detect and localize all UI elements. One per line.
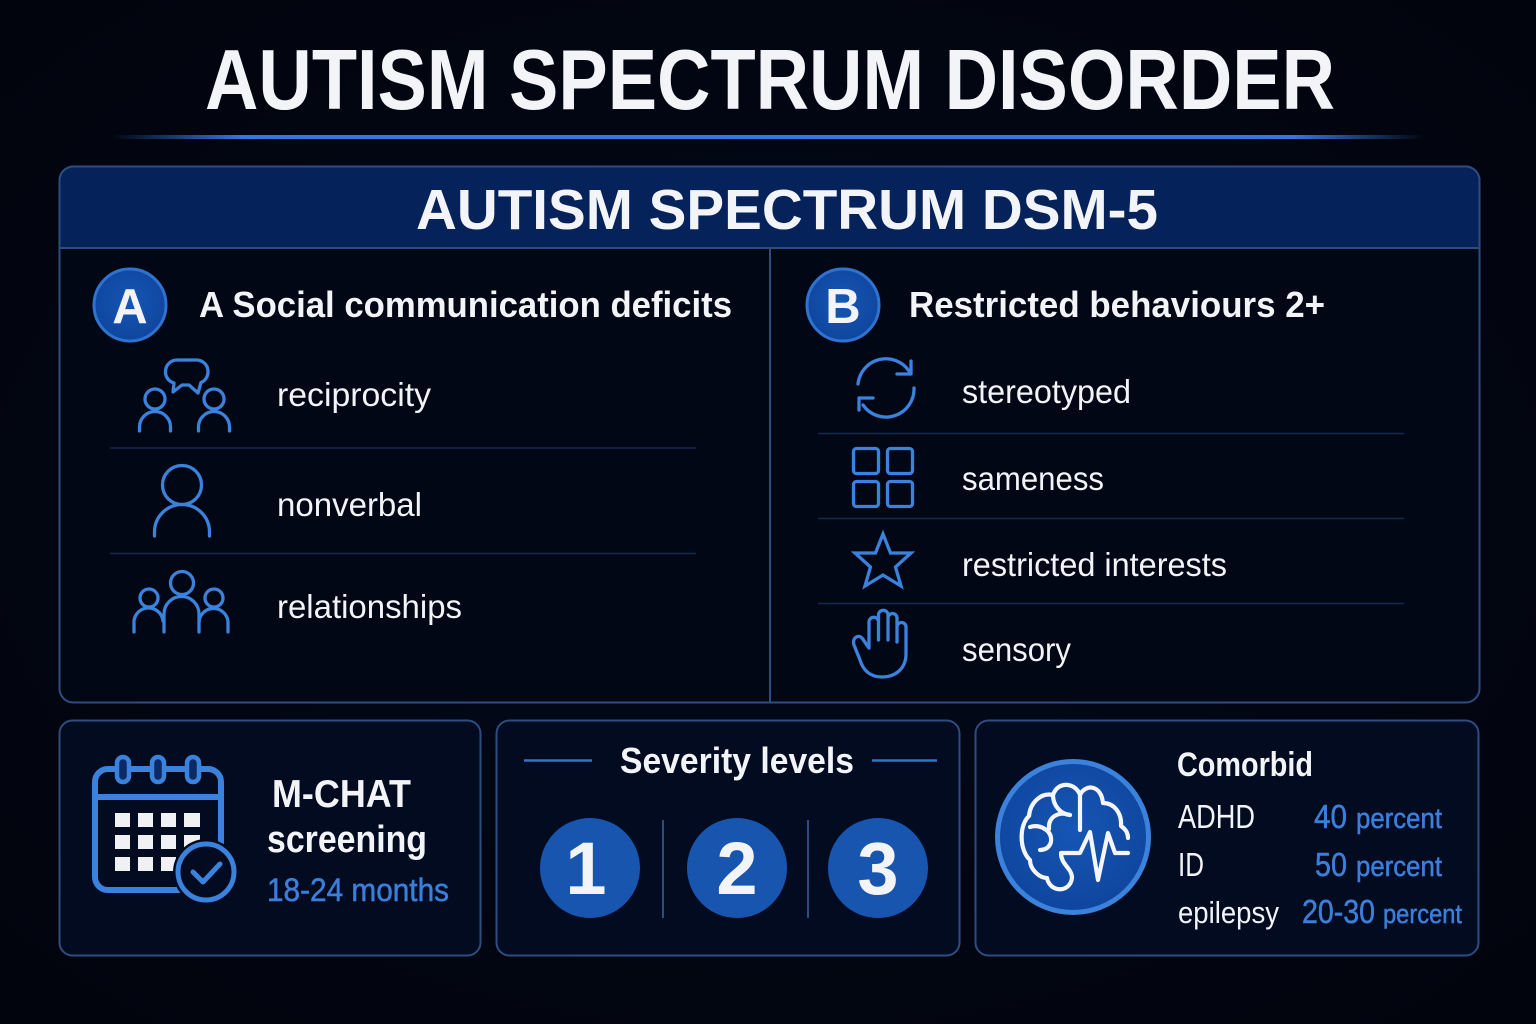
item: nonverbal: [154, 466, 422, 536]
icon: calendar with check: [94, 757, 239, 905]
item: sensory: [854, 610, 1071, 677]
label: reciprocity: [277, 376, 432, 413]
row: epilepsy: 20-30: [1302, 893, 1375, 930]
icon: group of three people: [134, 572, 228, 632]
badge A: [94, 269, 166, 341]
level 3: [828, 818, 928, 918]
label: sameness: [962, 460, 1104, 497]
icon: star: [855, 534, 911, 586]
row: ID: ID: [1178, 846, 1204, 883]
label: relationships: [277, 588, 462, 625]
screening heading: screening: [267, 819, 427, 861]
panel header: [60, 166, 1480, 248]
severity heading: Severity levels: [620, 740, 854, 781]
level 1: [540, 818, 640, 918]
panel: comorbid conditions: [976, 720, 1478, 956]
title: AUTISM SPECTRUM DISORDER: [205, 33, 1335, 128]
level 2: 2: [716, 827, 758, 910]
row: ID: [1178, 846, 1442, 883]
comorbid heading: Comorbid: [1177, 746, 1313, 784]
badge B: B: [825, 280, 861, 334]
M-CHAT heading: M-CHAT: [272, 773, 411, 816]
badge B: [807, 269, 879, 341]
icon: person: [154, 466, 210, 536]
panel: M-CHAT screening: [60, 720, 480, 956]
icon: two people with speech bubble: [140, 360, 230, 431]
row: ADHD: ADHD: [1178, 798, 1255, 835]
panel: DSM-5 criteria: [60, 166, 1480, 702]
column A: social communication deficits: [94, 269, 732, 632]
row: ADHD: percent: [1356, 803, 1442, 835]
icon: hand: [854, 610, 906, 677]
icon: brain with heartbeat: [998, 762, 1148, 912]
row: ADHD: 40: [1314, 798, 1347, 835]
column B: restricted behaviours: [807, 269, 1404, 677]
badge A: A: [112, 280, 148, 334]
level 1: 1: [565, 827, 607, 910]
label: stereotyped: [962, 373, 1131, 410]
item: reciprocity: [140, 360, 432, 431]
item: restricted interests: [855, 534, 1227, 586]
row: ADHD: [1178, 798, 1442, 835]
item: sameness: [854, 448, 1104, 506]
row: epilepsy: [1178, 893, 1462, 930]
row: ID: percent: [1356, 851, 1442, 883]
item: stereotyped: [858, 359, 1131, 417]
icon: repeat arrows: [858, 359, 914, 417]
label: nonverbal: [277, 486, 422, 523]
heading A: A Social communication deficits: [199, 284, 732, 325]
icon: four squares: [854, 448, 912, 506]
row: epilepsy: percent: [1383, 899, 1462, 929]
age range: 18-24 months: [267, 872, 449, 908]
panel heading: AUTISM SPECTRUM DSM-5: [416, 178, 1158, 242]
level 2: [687, 818, 787, 918]
title underline: [112, 135, 1424, 139]
heading B: Restricted behaviours 2+: [909, 284, 1325, 325]
row: epilepsy: epilepsy: [1178, 895, 1279, 930]
item: relationships: [134, 572, 462, 632]
level 3: 3: [857, 827, 899, 910]
label: sensory: [962, 631, 1071, 668]
row: ID: 50: [1315, 846, 1347, 883]
label: restricted interests: [962, 546, 1227, 583]
panel: severity levels: [496, 720, 960, 956]
